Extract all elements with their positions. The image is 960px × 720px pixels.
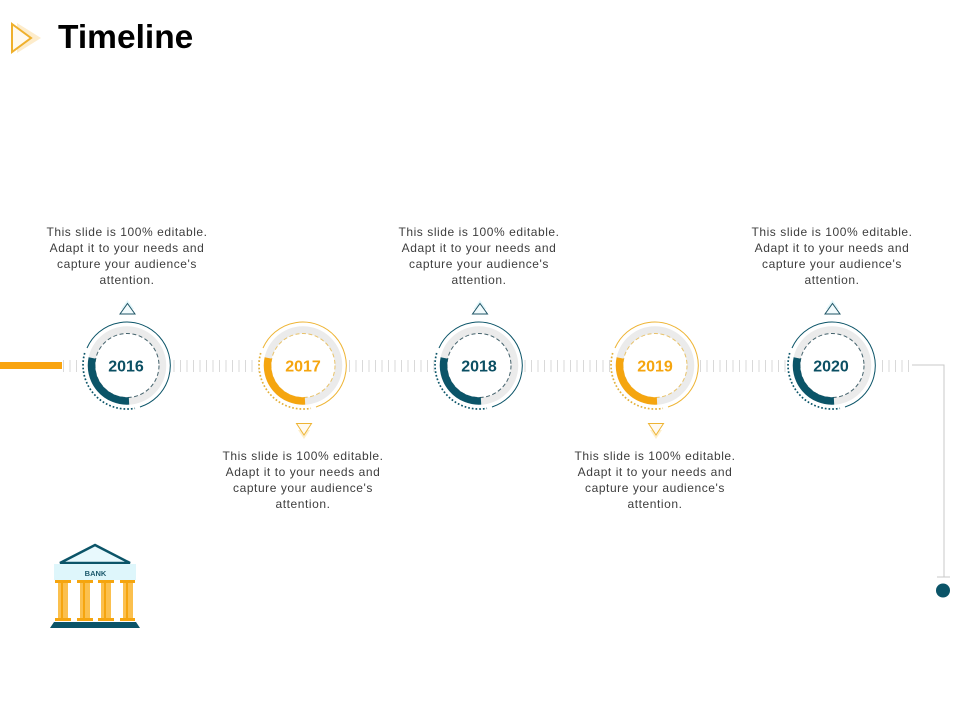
text block: 2020 (751, 225, 913, 287)
icon: bank building: BANK (85, 569, 107, 578)
icon: triangle up 2018 (472, 300, 488, 314)
milestone ring: 2019 (610, 320, 700, 410)
text block: 2018 (398, 225, 560, 287)
icon: triangle up 2016 (120, 300, 135, 314)
text block: 2016 (46, 225, 208, 287)
milestone ring: 2016 (82, 320, 172, 410)
milestone ring: 2017 (258, 320, 348, 410)
text block: 2017: This slide is 100% editable. (222, 449, 384, 463)
text block: 2019: Adapt it to your needs and (578, 465, 732, 479)
text block: 2020: attention. (804, 273, 859, 287)
year labels: 2020 (813, 358, 849, 376)
text block: 2019: attention. (628, 497, 682, 511)
text block: 2016: This slide is 100% editable. (46, 225, 208, 239)
year labels (108, 358, 849, 376)
milestone ring: 2020 (787, 320, 877, 410)
text block: 2016: attention. (100, 273, 154, 287)
text block: 2017: attention. (276, 497, 330, 511)
text block: 2019 (574, 449, 736, 511)
year labels: 2019 (637, 358, 673, 376)
icon: triangle down 2017 (296, 424, 312, 439)
text block: 2020: Adapt it to your needs and (755, 241, 909, 255)
year labels: 2017 (285, 358, 321, 376)
timeline end marker (936, 577, 950, 598)
year labels: 2018 (461, 358, 497, 376)
text block: 2018: This slide is 100% editable. (398, 225, 560, 239)
text block: 2017: Adapt it to your needs and (226, 465, 380, 479)
text block: 2017: capture your audience's (233, 481, 373, 495)
icon: triangle down 2019 (648, 424, 664, 439)
text block: 2020: This slide is 100% editable. (751, 225, 913, 239)
milestone ring: 2018 (434, 320, 524, 410)
text block: 2018: Adapt it to your needs and (402, 241, 556, 255)
title: Timeline (58, 19, 193, 56)
text block: 2016: capture your audience's (57, 257, 197, 271)
text block: 2020: capture your audience's (762, 257, 902, 271)
icon: title arrow (12, 23, 41, 53)
text block: 2019: This slide is 100% editable. (574, 449, 736, 463)
timeline track (0, 362, 944, 577)
text block: 2017 (222, 449, 384, 511)
text block: 2019: capture your audience's (585, 481, 725, 495)
year labels: 2016 (108, 358, 144, 376)
text block: 2016: Adapt it to your needs and (50, 241, 204, 255)
text block: 2018: capture your audience's (409, 257, 549, 271)
icon: bank building (50, 545, 140, 628)
text block: 2018: attention. (452, 273, 506, 287)
icon: triangle up 2020 (825, 300, 840, 314)
